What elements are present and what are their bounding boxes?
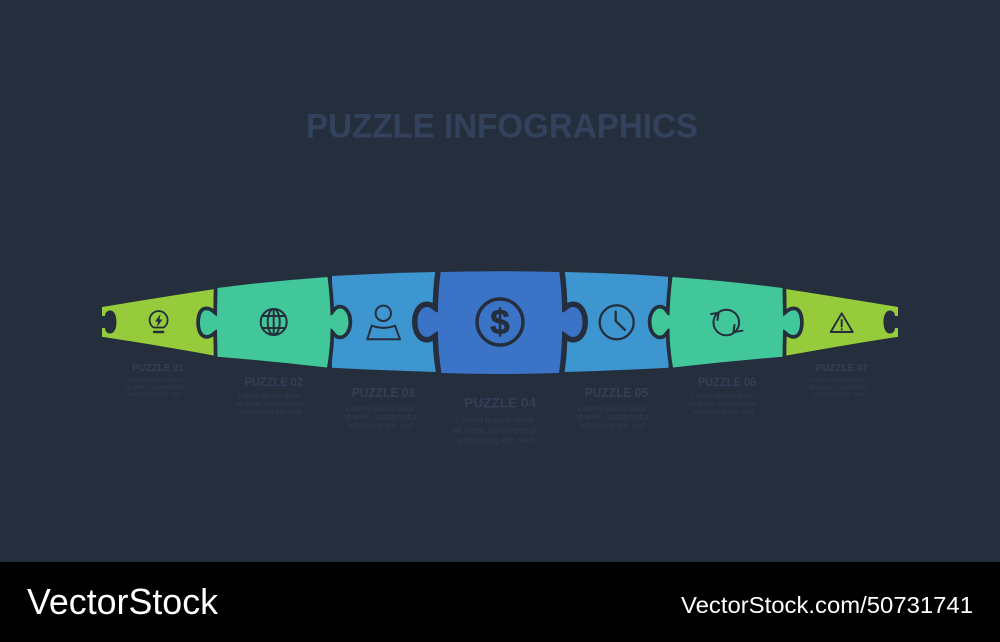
text block: puzzle 06: sit amet, consectetur [688, 401, 757, 408]
panel: puzzle 07 [786, 289, 898, 398]
text block: puzzle 07 [808, 378, 868, 398]
text block: puzzle 05: Lorem ipsum dolor [578, 404, 646, 413]
puzzle piece 03 [332, 272, 436, 372]
text block: puzzle 05: sit amet, consectetur [574, 412, 649, 422]
heading: puzzle 06: PUZZLE 06 [698, 377, 756, 389]
text block: puzzle 02: adipiscing elit, sed [240, 409, 301, 416]
text block: puzzle 01: sit amet, consectetur [124, 385, 184, 391]
footer logo: VectorStock: VectorStock [27, 581, 219, 622]
text block: puzzle 02: Lorem ipsum dolor [238, 393, 301, 400]
heading: puzzle 07: PUZZLE 07 [816, 362, 868, 374]
text block: puzzle 01: Lorem ipsum dolor [127, 378, 182, 384]
puzzle piece 05 [564, 272, 668, 372]
icon: person on map [367, 306, 400, 339]
text block: puzzle 05 [574, 404, 649, 430]
text block: puzzle 07: Lorem ipsum dolor [811, 378, 866, 384]
panel: puzzle 01 [102, 289, 215, 398]
heading: puzzle 01: PUZZLE 01 [132, 362, 184, 374]
heading: puzzle 02: PUZZLE 02 [244, 377, 303, 389]
text block: puzzle 05: adipiscing elit, sed [579, 421, 645, 430]
panel: puzzle 03 [332, 272, 436, 430]
text block: puzzle 07: sit amet, consectetur [808, 385, 868, 391]
panel: puzzle 05 [564, 272, 668, 430]
footer image id: VectorStock.com/50731741 [681, 592, 973, 618]
puzzle piece 04 [418, 271, 582, 374]
puzzle piece 07 [786, 289, 898, 356]
title: PUZZLE INFOGRAPHICS [306, 108, 698, 146]
text block: puzzle 03 [342, 404, 417, 430]
text block: puzzle 01: adipiscing elit, sed [128, 392, 181, 398]
text block: puzzle 04: Lorem ipsum dolor [456, 415, 534, 425]
puzzle piece 02 [200, 277, 348, 368]
text block: puzzle 03: adipiscing elit, sed [347, 421, 413, 430]
heading: puzzle 03: PUZZLE 03 [352, 386, 415, 400]
panel: puzzle 06 [652, 277, 800, 416]
text block: puzzle 07: adipiscing elit, sed [812, 392, 865, 398]
footer bar [0, 562, 1000, 642]
heading: puzzle 04: PUZZLE 04 [464, 394, 536, 410]
puzzle piece 01 [102, 289, 215, 356]
text block: puzzle 04 [452, 415, 537, 445]
text block: puzzle 06 [688, 393, 757, 416]
text block: puzzle 02 [235, 393, 304, 416]
panel: puzzle 02 [200, 277, 348, 416]
icon: refresh arrows [711, 310, 742, 335]
text block: puzzle 04: adipiscing elit, sed [458, 435, 534, 445]
text block: puzzle 02: sit amet, consectetur [235, 401, 304, 408]
text block: puzzle 04: sit amet, consectetur [452, 425, 537, 435]
icon: dollar coin: $ [490, 303, 510, 342]
icon: globe [261, 309, 287, 335]
heading: puzzle 05: PUZZLE 05 [585, 386, 648, 400]
panel: puzzle 04 [418, 271, 582, 445]
text block: puzzle 06: adipiscing elit, sed [693, 409, 754, 416]
text block: puzzle 01 [124, 378, 184, 398]
icon: dollar coin [477, 299, 523, 345]
icon: light bulb [150, 311, 168, 332]
text block: puzzle 06: Lorem ipsum dolor [692, 393, 754, 400]
puzzle piece 06 [652, 277, 800, 368]
icon: warning triangle [831, 313, 853, 332]
icon: clock [600, 305, 634, 339]
text block: puzzle 03: sit amet, consectetur [342, 412, 417, 422]
text block: puzzle 03: Lorem ipsum dolor [346, 404, 414, 413]
